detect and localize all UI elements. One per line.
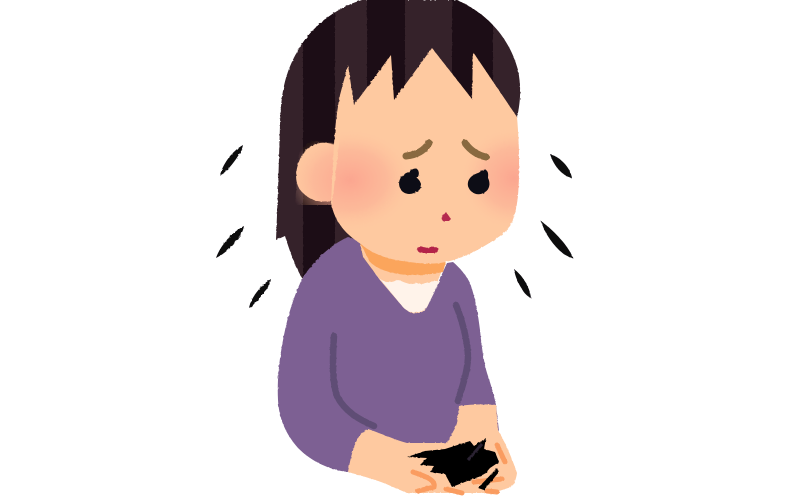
fallen hair clump — [407, 438, 499, 490]
face — [296, 48, 520, 264]
nose — [441, 212, 451, 221]
eyes — [399, 169, 489, 194]
sweater fold lines — [333, 336, 374, 426]
finger lines — [413, 445, 505, 493]
sweater — [278, 237, 500, 480]
illustration: worried woman holding fallen hair — [216, 0, 574, 496]
trembling marks left — [216, 145, 271, 308]
mouth — [417, 247, 439, 253]
eyebrows — [406, 143, 486, 157]
ear — [296, 143, 338, 202]
hair — [276, 0, 520, 300]
trembling marks right — [514, 154, 573, 298]
hands — [348, 404, 517, 493]
neck and collar — [360, 243, 447, 313]
